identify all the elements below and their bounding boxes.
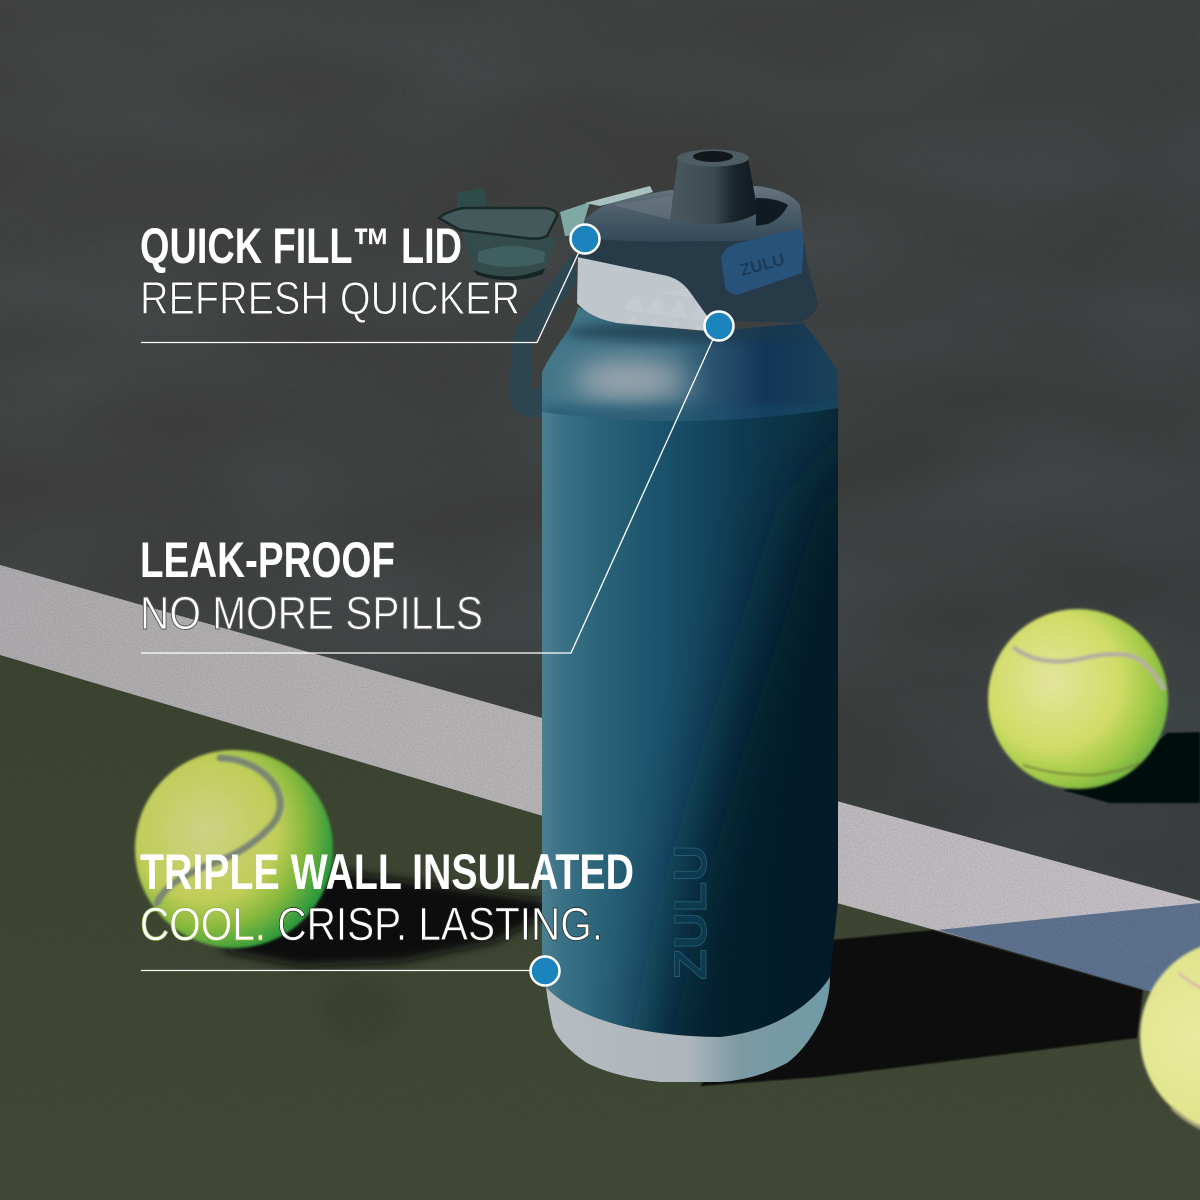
dot (530, 956, 560, 986)
bottle body (542, 408, 838, 1037)
leader line (141, 239, 585, 342)
heading: QUICK FILL™ LID (140, 218, 462, 274)
bottle (437, 150, 838, 1082)
dot (570, 224, 600, 254)
lid button: ZULU (738, 250, 787, 280)
dot (704, 312, 734, 340)
heading: LEAK-PROOF (140, 532, 395, 588)
shadow: bottle on court (700, 930, 1143, 1086)
leader line (141, 970, 531, 972)
lid button (721, 230, 804, 295)
neck band (577, 257, 708, 331)
callout: triple wall insulated (140, 844, 634, 986)
base bumper (546, 977, 830, 1082)
handle (509, 253, 577, 417)
callout: quick fill lid (140, 218, 600, 342)
tennis ball: right (988, 609, 1168, 789)
subheading: COOL. CRISP. LASTING. (140, 898, 603, 950)
shadow: left ball (217, 870, 545, 966)
flip cap (439, 186, 653, 280)
spout (670, 150, 758, 224)
callout: leak-proof (140, 312, 734, 653)
heading: TRIPLE WALL INSULATED (140, 844, 634, 900)
tennis ball: bottom right (1140, 940, 1200, 1132)
lid opening (756, 198, 788, 226)
tennis ball: left (135, 750, 333, 948)
subheading: REFRESH QUICKER (140, 272, 520, 324)
leader line (141, 326, 719, 653)
embossed logo: ZULU (665, 845, 716, 980)
shadow: right ball (1063, 732, 1200, 803)
bottle shoulder (542, 307, 838, 421)
lid rim (580, 186, 804, 242)
lid top surface (612, 196, 672, 220)
subheading: NO MORE SPILLS (140, 587, 483, 639)
lid skirt (577, 232, 818, 323)
